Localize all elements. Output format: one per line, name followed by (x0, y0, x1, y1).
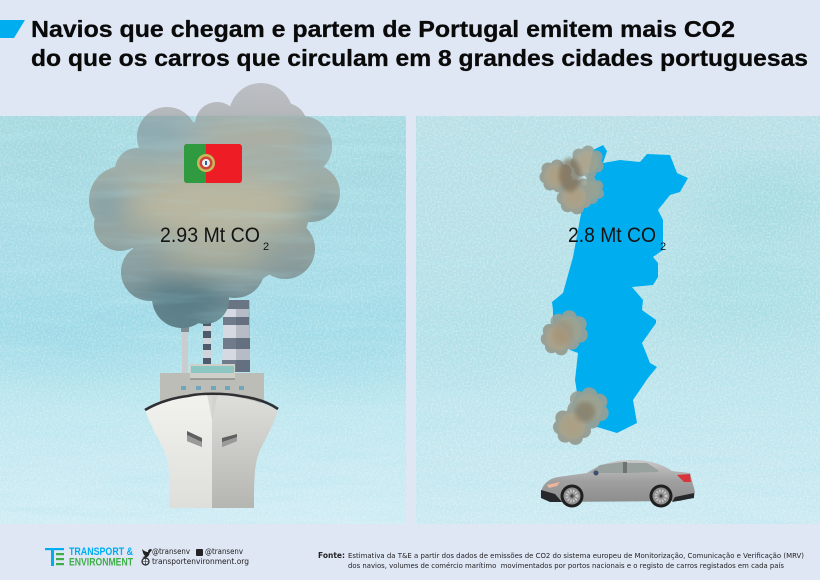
bridge (190, 364, 235, 380)
logo wordmark: ENVIRONMENT (69, 556, 133, 568)
social links: @transenv (152, 547, 191, 556)
source note: dos navios, volumes de comércio marítimo movimentados por portos nacionais e o registo de carros registados em cada país (348, 562, 784, 570)
icon: car (541, 460, 695, 508)
icon: ship with chimneys (145, 300, 278, 508)
social links: @transenv (205, 547, 244, 556)
smoke: north (540, 146, 604, 214)
smoke: centre (541, 310, 588, 355)
hull right (212, 393, 278, 508)
large chimney (222, 300, 250, 372)
source note: Estimativa da T&E a partir dos dados de emissões de CO2 do sistema europeu de Monitorização, Comunicação e Verificação (MRV) (348, 552, 804, 560)
hull bow highlight (207, 394, 218, 420)
social links (142, 547, 249, 566)
label: cars emissions: 2.8 Mt CO (568, 224, 656, 247)
smoke: south (553, 387, 609, 445)
icon: title tag (0, 20, 25, 38)
anchor right (222, 434, 237, 447)
map of Portugal (552, 145, 688, 433)
smoke cloud (89, 83, 340, 328)
icon: facebook (196, 549, 203, 556)
social links: transportenvironment.org (152, 557, 249, 566)
logo wordmark (69, 546, 133, 568)
title: Navios que chegam e partem de Portugal emitem mais CO2 (31, 16, 735, 42)
panel: car emissions map (410, 116, 820, 524)
hull rim (145, 394, 278, 410)
panel: ship emissions (0, 116, 430, 524)
superstructure (160, 373, 264, 403)
medium chimney (203, 316, 211, 366)
logo wordmark: TRANSPORT & (69, 546, 133, 558)
portholes (181, 386, 244, 390)
label: ships emissions: 2.93 Mt CO (160, 224, 260, 247)
hull left (145, 393, 212, 508)
icon: twitter (142, 549, 152, 558)
small chimney (181, 327, 189, 374)
anchor left (187, 431, 202, 447)
source note (318, 551, 804, 570)
label: cars emissions: 2 (660, 241, 666, 253)
logo: Transport & Environment (45, 546, 133, 568)
rear wheel (650, 484, 672, 508)
icon: Portuguese flag (184, 144, 242, 183)
source note: Fonte: (318, 551, 345, 560)
title (31, 16, 808, 71)
logo mark (45, 548, 64, 566)
front wheel (560, 484, 584, 508)
icon: globe (142, 558, 149, 565)
title: do que os carros que circulam em 8 grandes cidades portuguesas (31, 45, 808, 71)
label: ships emissions: 2 (263, 241, 269, 253)
